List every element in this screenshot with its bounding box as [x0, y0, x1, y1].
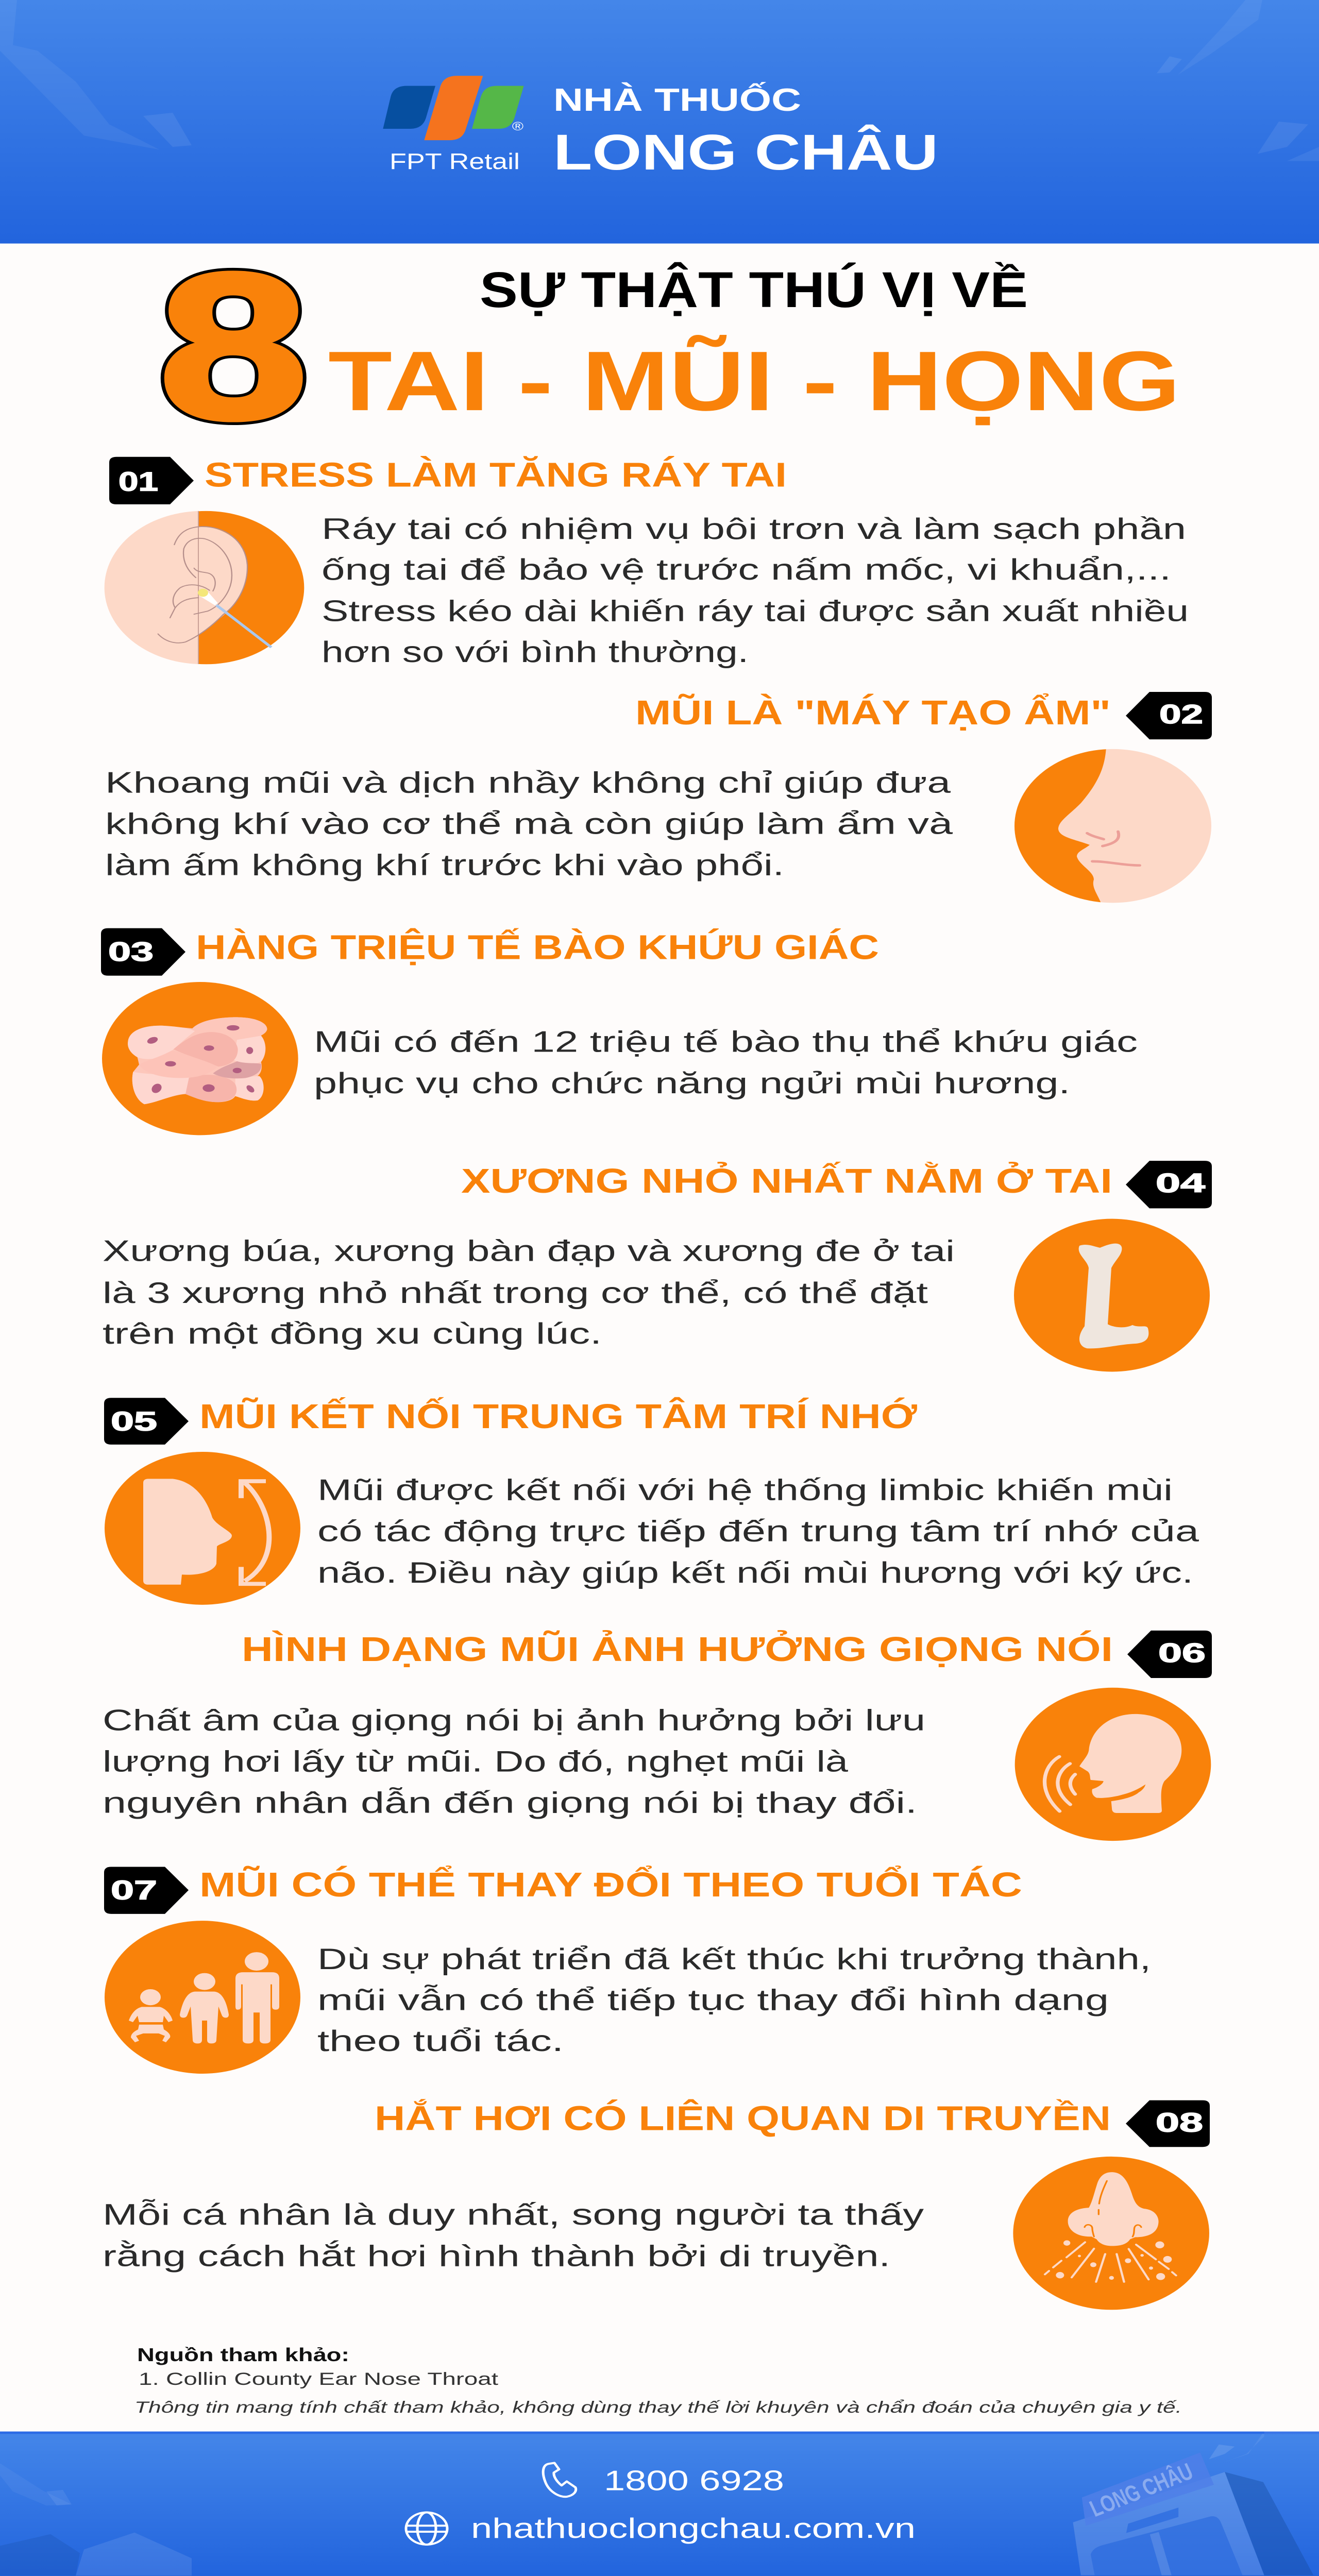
references and disclaimer [134, 2345, 1182, 2416]
text 06 [103, 1704, 925, 1820]
storefront illustration: LONG CHÂU [1084, 2459, 1199, 2521]
heading 01: STRESS LÀM TĂNG RÁY TAI [205, 456, 787, 494]
text 04: Xương búa, xương bàn đạp và xương đe ở tai [103, 1234, 955, 1268]
text 06: Chất âm của giọng nói bị ảnh hưởng bởi lưu [103, 1704, 925, 1737]
text 05: Mũi được kết nối với hệ thống limbic khiến mùi [317, 1473, 1173, 1507]
FPT Retail logo: ® [512, 120, 523, 133]
header banner [0, 0, 1319, 244]
big number 8: 8 [159, 230, 308, 462]
title line 2: TAI - MŨI - HỌNG [328, 333, 1180, 428]
text 01: ống tai để bảo vệ trước nấm mốc, vi khuẩn,... [322, 553, 1171, 586]
text 08: Mỗi cá nhân là duy nhất, song người ta thấy [103, 2198, 924, 2231]
text 01: hơn so với bình thường. [322, 636, 749, 669]
panel: fact 07 [104, 1866, 1151, 2074]
badge 02: 02 [1159, 699, 1203, 729]
text 05: não. Điều này giúp kết nối mùi hương với ký ức. [317, 1556, 1193, 1589]
text 04: là 3 xương nhỏ nhất trong cơ thể, có thể đặt [103, 1277, 928, 1310]
heading 07: MŨI CÓ THỂ THAY ĐỔI THEO TUỔI TÁC [199, 1866, 1022, 1904]
title [159, 230, 1180, 462]
big number 8: 8 [159, 230, 308, 462]
phone number: 1800 6928 [604, 2465, 784, 2497]
website url: nhathuoclongchau.com.vn [471, 2513, 916, 2544]
icon: globe [406, 2513, 447, 2545]
icon: head with arrows [105, 1452, 300, 1605]
reference item: 1. Collin County Ear Nose Throat [139, 2369, 498, 2389]
icon: sneezing nose [1013, 2157, 1209, 2310]
badge 07: 07 [111, 1875, 157, 1905]
icon: family of three ages [105, 1921, 300, 2074]
text 03: Mũi có đến 12 triệu tế bào thụ thể khứu giác [314, 1025, 1138, 1058]
badge 03: 03 [108, 937, 154, 967]
text 07: mũi vẫn có thể tiếp tục thay đổi hình dạng [317, 1984, 1109, 2017]
text 05 [317, 1473, 1199, 1589]
panel: fact 02 [105, 692, 1212, 906]
badge 07 [104, 1867, 189, 1914]
badge 01: 01 [119, 466, 158, 497]
icon: olfactory cells [102, 982, 298, 1135]
panel: fact 05 [104, 1397, 1199, 1605]
badge 04 [1126, 1161, 1212, 1208]
panel: fact 01 [105, 456, 1189, 669]
icon: bone [1014, 1219, 1210, 1371]
text 07 [317, 1943, 1151, 2058]
text 07: Dù sự phát triển đã kết thúc khi trưởng thành, [317, 1943, 1151, 1976]
text 01: Stress kéo dài khiến ráy tai được sản xuất nhiều [322, 595, 1189, 628]
heading 04: XƯƠNG NHỎ NHẤT NẰM Ở TAI [461, 1162, 1112, 1200]
references heading: Nguồn tham khảo: [137, 2345, 349, 2365]
text 03 [314, 1025, 1138, 1100]
text 02: không khí vào cơ thể mà còn giúp làm ẩm và [105, 807, 953, 841]
text 02 [105, 766, 953, 882]
text 04: trên một đồng xu cùng lúc. [103, 1317, 602, 1350]
panel: fact 08 [103, 2099, 1210, 2310]
panel: fact 03 [101, 928, 1138, 1135]
contact: phone [543, 2463, 784, 2497]
badge 08: 08 [1156, 2107, 1203, 2138]
brand name [553, 81, 938, 180]
text 02: Khoang mũi và dịch nhầy không chỉ giúp đưa [105, 766, 951, 799]
text 01 [322, 513, 1189, 669]
disclaimer: Thông tin mang tính chất tham khảo, không dùng thay thế lời khuyên và chẩn đoán của chuyên gia y tế. [134, 2398, 1182, 2416]
heading 06: HÌNH DẠNG MŨI ẢNH HƯỞNG GIỌNG NÓI [242, 1631, 1113, 1669]
FPT Retail logo [383, 76, 524, 174]
text 07: theo tuổi tác. [317, 2025, 564, 2058]
text 05: có tác động trực tiếp đến trung tâm trí nhớ của [317, 1515, 1199, 1548]
badge 06: 06 [1158, 1638, 1206, 1668]
text 03: phục vụ cho chức năng ngửi mùi hương. [314, 1067, 1070, 1100]
heading 03: HÀNG TRIỆU TẾ BÀO KHỨU GIÁC [196, 928, 879, 967]
heading 08: HẮT HƠI CÓ LIÊN QUAN DI TRUYỀN [375, 2099, 1111, 2138]
icon: speaking head [1015, 1688, 1211, 1841]
text 02: làm ấm không khí trước khi vào phổi. [105, 849, 784, 882]
heading 02: MŨI LÀ "MÁY TẠO ẨM" [635, 693, 1111, 732]
badge 04: 04 [1156, 1168, 1205, 1198]
icon: phone [543, 2463, 576, 2497]
heading 05: MŨI KẾT NỐI TRUNG TÂM TRÍ NHỚ [199, 1397, 917, 1436]
badge 08 [1126, 2100, 1210, 2147]
text 06: nguyên nhân dẫn đến giọng nói bị thay đổi. [103, 1786, 917, 1820]
panel: fact 04 [103, 1161, 1212, 1371]
panel: fact 06 [103, 1631, 1212, 1841]
badge 06 [1127, 1631, 1212, 1678]
badge 01 [109, 457, 194, 504]
text 08 [103, 2198, 924, 2273]
icon: ear with cotton swab [105, 511, 304, 664]
title line 1: SỰ THẬT THÚ VỊ VỀ [480, 261, 1028, 318]
FPT Retail logo: FPT Retail [390, 149, 520, 174]
icon: nose profile [1005, 747, 1211, 906]
text 01: Ráy tai có nhiệm vụ bôi trơn và làm sạch phần [322, 513, 1186, 546]
brand name: LONG CHÂU [553, 124, 938, 180]
storefront illustration [1073, 2431, 1319, 2575]
badge 05: 05 [111, 1406, 157, 1436]
text 06: lượng hơi lấy từ mũi. Do đó, nghẹt mũi là [103, 1745, 848, 1778]
text 08: rằng cách hắt hơi hình thành bởi di truyền. [103, 2240, 890, 2273]
badge 02 [1126, 692, 1212, 739]
footer banner [0, 2431, 1319, 2576]
contact: website [406, 2513, 916, 2545]
brand name: NHÀ THUỐC [553, 81, 801, 118]
badge 05 [104, 1398, 189, 1445]
text 04 [103, 1234, 955, 1350]
badge 03 [101, 928, 185, 976]
